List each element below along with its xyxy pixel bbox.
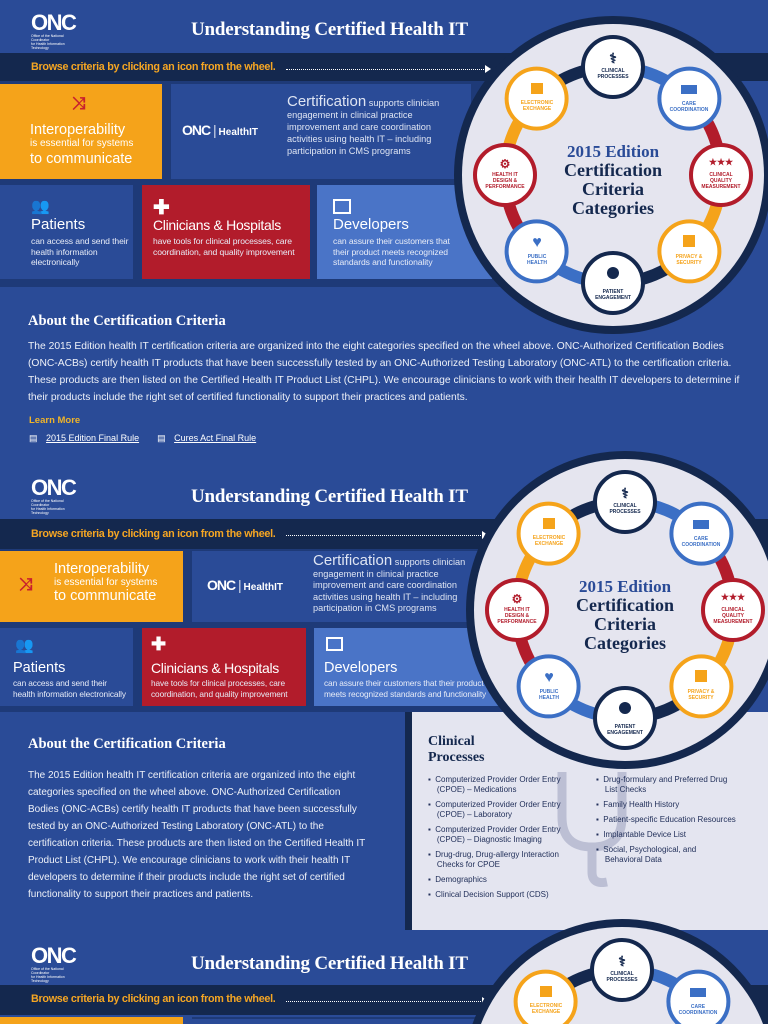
panel: clinicians — [142, 628, 306, 706]
text block: about: The 2015 Edition health IT certification criteria are organized into the eight categories specified on the wheel above. ONC-Authorized Certification Bodies (ONC-ACBs) certify health IT products that have been successfully tested by an ONC-Authorized Testing Laboratory (ONC-ATL) to the certification criteria. These products are then listed on the Certified Health IT Product List (CHPL). We encourage clinicians to work with their health IT developers to determine if their products include the right set of certified functionality to support their practices and patients. — [28, 770, 365, 900]
browse band — [0, 985, 768, 1015]
panel: clinical processes: Processes — [428, 750, 484, 765]
list: right column: Behavioral Data — [605, 855, 662, 864]
panel: certification (partial) — [192, 1017, 490, 1024]
section 3 — [0, 935, 768, 1024]
logo: ONC: ONC — [31, 943, 75, 968]
browse band — [0, 53, 768, 81]
panel: interoperability — [0, 84, 162, 179]
logo: ONC: for Health Information Technology — [31, 507, 65, 515]
wheel 2: ELECTRONIC — [533, 535, 566, 541]
wheel 1: PERFORMANCE — [485, 184, 525, 190]
panel: interoperability (partial) — [0, 1017, 183, 1024]
wheel 2: 2015 Edition — [579, 577, 672, 596]
wheel 2: Criteria — [594, 614, 656, 634]
title: Understanding Certified Health IT — [191, 953, 468, 974]
wheel 1: PUBLIC — [528, 254, 547, 260]
wheel 1: PATIENT — [603, 289, 623, 295]
list: left column: ▪ Computerized Provider Order Entry — [428, 825, 561, 834]
logo: ONC HealthIT: ONC | HealthIT — [182, 122, 258, 138]
wheel 1: MEASUREMENT — [701, 184, 741, 190]
panel: interoperability: Interoperability — [30, 122, 125, 138]
panel: clinicians: have tools for clinical processes, care coordination, and quality improvement — [151, 678, 288, 698]
wheel 2: ⚕ — [621, 485, 629, 501]
panel: clinicians: Clinicians & Hospitals — [153, 217, 281, 233]
wheel 2: ENGAGEMENT — [607, 730, 643, 736]
logo: ONC — [31, 943, 76, 983]
panel: interoperability: to communicate — [30, 151, 132, 167]
list: right column: ▪ Drug-formulary and Preferred Drug — [596, 775, 727, 784]
panel: patients: can access and send their health information electronically — [13, 678, 126, 698]
wheel 2: CLINICAL — [721, 607, 745, 613]
panel: developers — [317, 185, 492, 279]
icon: developer — [333, 199, 351, 214]
wheel 1: Categories — [572, 198, 654, 218]
wheel 2: EXCHANGE — [535, 541, 564, 547]
wheel 2: PERFORMANCE — [497, 619, 537, 625]
wheel 2: PATIENT — [615, 724, 635, 730]
wheel 1: PROCESSES — [597, 74, 629, 80]
list: left column: ▪ Demographics — [428, 875, 487, 884]
wheel 2: CLINICAL — [613, 503, 637, 509]
panel: patients: can access and send their health information electronically — [31, 236, 128, 267]
panel: certification — [192, 551, 492, 622]
list: right column: ▪ Social, Psychological, and — [596, 845, 696, 854]
list: right column: ▪ Implantable Device List — [596, 830, 686, 839]
wheel 1: ELECTRONIC — [521, 100, 554, 106]
panel: interoperability: Interoperability — [54, 561, 149, 577]
wheel 1: Criteria — [582, 179, 644, 199]
icon: developer — [326, 637, 343, 651]
text block: about: About the Certification Criteria — [28, 313, 226, 329]
browse instruction: Browse criteria by clicking an icon from the wheel. — [31, 528, 276, 540]
icon: shuffle: ⤨ — [72, 94, 86, 113]
wheel 1: ⚕ — [609, 50, 617, 66]
panel: developers: Developers — [324, 660, 397, 676]
icon: cross: ✚ — [151, 634, 166, 654]
arrow: dotted 2 — [286, 531, 486, 539]
panel: certification: Certification supports clinician engagement in clinical practice improvement and care coordination activities using health IT – including participation in CMS programs — [313, 552, 465, 613]
wheel 3: CARE — [691, 1004, 706, 1010]
wheel 1: HEALTH IT — [492, 172, 518, 178]
logo: ONC — [31, 475, 76, 515]
panel: interoperability: to communicate — [54, 588, 156, 604]
list: left column: (CPOE) – Diagnostic Imaging — [437, 835, 542, 844]
text block: about — [28, 313, 740, 403]
list: left column: ▪ Drug-drug, Drug-allergy Interaction — [428, 850, 559, 859]
row background — [0, 81, 500, 287]
panel: interoperability: is essential for systems — [54, 577, 157, 588]
panel: developers: can assure their customers that their product meets recognized standards and functionality — [324, 678, 486, 698]
list: left column — [428, 775, 561, 899]
wheel 2: CARE — [694, 536, 709, 542]
wheel 2: MEASUREMENT — [713, 619, 753, 625]
wheel 3 — [472, 919, 768, 1024]
panel: certification: Certification supports clinician engagement in clinical practice improvement and care coordination activities using health IT – including participation in CMS programs — [287, 93, 439, 156]
wheel 3: PROCESSES — [606, 977, 638, 983]
section 1 — [0, 0, 768, 455]
wheel 1: ★★★ — [709, 157, 734, 167]
browse instruction: Browse criteria by clicking an icon from the wheel. — [31, 61, 276, 73]
wheel 2: COORDINATION — [682, 542, 721, 548]
wheel 1: CARE — [682, 101, 697, 107]
wheel 3: EXCHANGE — [532, 1009, 561, 1015]
wheel 2: Categories — [584, 633, 666, 653]
logo: ONC: ONC — [31, 10, 75, 35]
list: right column: List Checks — [605, 785, 646, 794]
icon: stethoscope watermark — [558, 772, 626, 887]
wheel 1: EXCHANGE — [523, 106, 552, 112]
logo: ONC: Office of the National Coordinator — [31, 499, 64, 507]
title: Understanding Certified Health IT — [191, 486, 468, 507]
wheel 3: COORDINATION — [679, 1010, 718, 1016]
wheel 3: CLINICAL — [610, 971, 634, 977]
panel: interoperability — [0, 551, 183, 622]
wheel 1: COORDINATION — [670, 107, 709, 113]
browse instruction: Browse criteria by clicking an icon from the wheel. — [31, 993, 276, 1005]
icon: people: 👥 — [15, 637, 34, 654]
panel: clinical processes: Clinical — [428, 734, 475, 749]
section 1: ▤ 2015 Edition Final Rule ▤ Cures Act Final Rule — [29, 433, 256, 443]
wheel 2 — [466, 451, 768, 769]
section 2 — [0, 455, 768, 935]
wheel 2: Certification — [576, 595, 674, 615]
wheel 1: ⚙ — [500, 157, 510, 171]
wheel 1: ♥ — [532, 234, 542, 251]
logo: ONC: for Health Information Technology — [31, 975, 65, 983]
wheel 2: QUALITY — [722, 613, 745, 619]
logo: ONC: Office of the National Coordinator — [31, 34, 64, 42]
wheel 3: ELECTRONIC — [530, 1003, 563, 1009]
wheel 2: PUBLIC — [540, 689, 559, 695]
row background — [0, 549, 520, 712]
wheel 1: QUALITY — [710, 178, 733, 184]
icon: people: 👥 — [31, 198, 50, 215]
wheel 1: DESIGN & — [493, 178, 517, 184]
logo: ONC: for Health Information Technology — [31, 42, 65, 50]
wheel 2: PROCESSES — [609, 509, 641, 515]
wheel 2: PRIVACY & — [688, 689, 715, 695]
wheel 2: HEALTH — [539, 695, 559, 701]
icon: shuffle: ⤨ — [19, 575, 33, 594]
wheel 2: ♥ — [544, 669, 554, 686]
list: left column: ▪ Computerized Provider Order Entry — [428, 800, 561, 809]
wheel 1: HEALTH — [527, 260, 547, 266]
wheel 2: SECURITY — [688, 695, 714, 701]
wheel 1: Certification — [564, 160, 662, 180]
list: left column: Checks for CPOE — [437, 860, 500, 869]
panel: developers: Developers — [333, 216, 409, 233]
list: left column: ▪ Clinical Decision Support (CDS) — [428, 890, 549, 899]
panel: patients — [0, 628, 133, 706]
wheel 1: CLINICAL — [709, 172, 733, 178]
wheel 3: ⚕ — [618, 953, 626, 969]
logo: ONC: Office of the National Coordinator — [31, 967, 64, 975]
panel: clinical processes — [405, 712, 768, 930]
panel: patients: Patients — [31, 216, 85, 233]
list: right column — [596, 775, 736, 864]
panel: patients — [0, 185, 133, 279]
icon: cross: ✚ — [153, 197, 170, 219]
wheel 1: CLINICAL — [601, 68, 625, 74]
text block: about: The 2015 Edition health IT certification criteria are organized into the eight categories specified on the wheel above. ONC-Authorized Certification Bodies (ONC-ACBs) certify health IT products that have been successfully tested by an ONC-Authorized Testing Laboratory (ONC-ATL) to the certification criteria. These products are then listed on the Certified Health IT Product List (CHPL). We encourage clinicians to work with their health IT developers to determine if their products include the right set of certified functionality to support their practices and patients. — [28, 341, 739, 403]
panel: clinicians — [142, 185, 310, 279]
panel: patients: Patients — [13, 660, 65, 676]
list: left column: (CPOE) – Laboratory — [437, 810, 512, 819]
list: left column: ▪ Computerized Provider Order Entry — [428, 775, 561, 784]
arrow: dotted — [286, 997, 484, 1002]
logo: ONC: ONC — [31, 475, 75, 500]
list: right column: ▪ Patient-specific Education Resources — [596, 815, 736, 824]
wheel 2: HEALTH IT — [504, 607, 530, 613]
panel: developers: can assure their customers that their product meets recognized standards and functionality — [333, 236, 450, 267]
panel: developers — [314, 628, 510, 706]
wheel 1: 2015 Edition — [567, 142, 660, 161]
wheel 2: ⚙ — [512, 592, 522, 606]
wheel 2: ★★★ — [721, 592, 746, 602]
panel: clinicians: Clinicians & Hospitals — [151, 660, 279, 676]
title: Understanding Certified Health IT — [191, 19, 468, 40]
arrow: dotted — [286, 69, 486, 70]
panel: interoperability: is essential for systems — [30, 138, 133, 149]
logo: ONC HealthIT: ONC | HealthIT — [207, 577, 283, 593]
wheel 1: ENGAGEMENT — [595, 295, 631, 301]
wheel 1: SECURITY — [676, 260, 702, 266]
list: right column: ▪ Family Health History — [596, 800, 679, 809]
links: learn more: Learn More — [29, 415, 80, 426]
panel: clinicians: have tools for clinical processes, care coordination, and quality improvement — [153, 236, 295, 256]
wheel 1: PRIVACY & — [676, 254, 703, 260]
wheel 2: DESIGN & — [505, 613, 529, 619]
text block: about: About the Certification Criteria — [28, 736, 226, 752]
panel: certification — [171, 84, 471, 179]
logo: ONC — [31, 10, 76, 50]
wheel 1 — [454, 16, 768, 334]
list: left column: (CPOE) – Medications — [437, 785, 516, 794]
browse band — [0, 519, 768, 549]
